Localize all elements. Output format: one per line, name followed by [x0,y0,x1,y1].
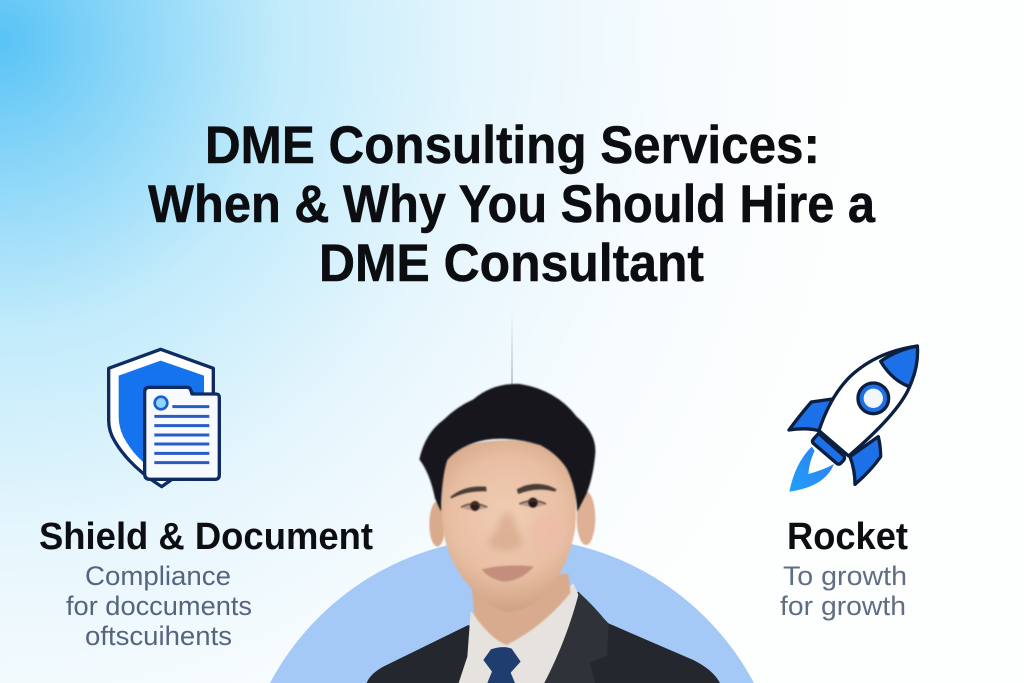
title: When & Why You Should Hire a [148,175,875,234]
rocket nose [881,346,918,387]
eyebrows [450,486,487,498]
icon: document [145,387,219,479]
face [442,440,576,612]
icon: rocket [789,346,918,492]
cheek tint [530,513,567,553]
rocket left fin [789,399,835,431]
icon: shield and document [109,349,219,487]
suit [367,592,720,683]
title: DME Consultant [319,234,704,293]
title [148,116,875,293]
blue circle behind portrait [270,537,754,683]
title: DME Consulting Services: [205,116,820,175]
text: growth description [780,561,907,621]
text: compliance description: Compliance [85,561,231,591]
left label [39,516,373,651]
rocket flame [789,447,834,492]
tie [483,647,521,683]
rocket right fin [850,437,881,484]
rocket nozzle [812,433,845,464]
icon: shield [109,349,213,487]
text: compliance description [66,561,252,651]
center divider line [511,310,513,385]
text: growth description: for growth [780,591,906,621]
neck [472,573,571,645]
text: growth description: To growth [783,561,907,591]
right lapel [544,593,608,683]
ears [429,501,445,547]
rocket window [858,383,889,414]
portrait: consultant [367,384,720,683]
left eye [461,501,487,511]
right eye [519,498,546,508]
right label [780,516,908,621]
nose [487,513,523,551]
hair [419,384,595,512]
heading: shield and document: Shield & Document [39,516,373,558]
shirt collar [459,583,580,683]
mouth [482,565,534,582]
text: compliance description: oftscuihents [85,621,232,651]
heading: rocket: Rocket [787,516,908,558]
text: compliance description: for doccuments [66,591,252,621]
rocket body [819,346,917,456]
